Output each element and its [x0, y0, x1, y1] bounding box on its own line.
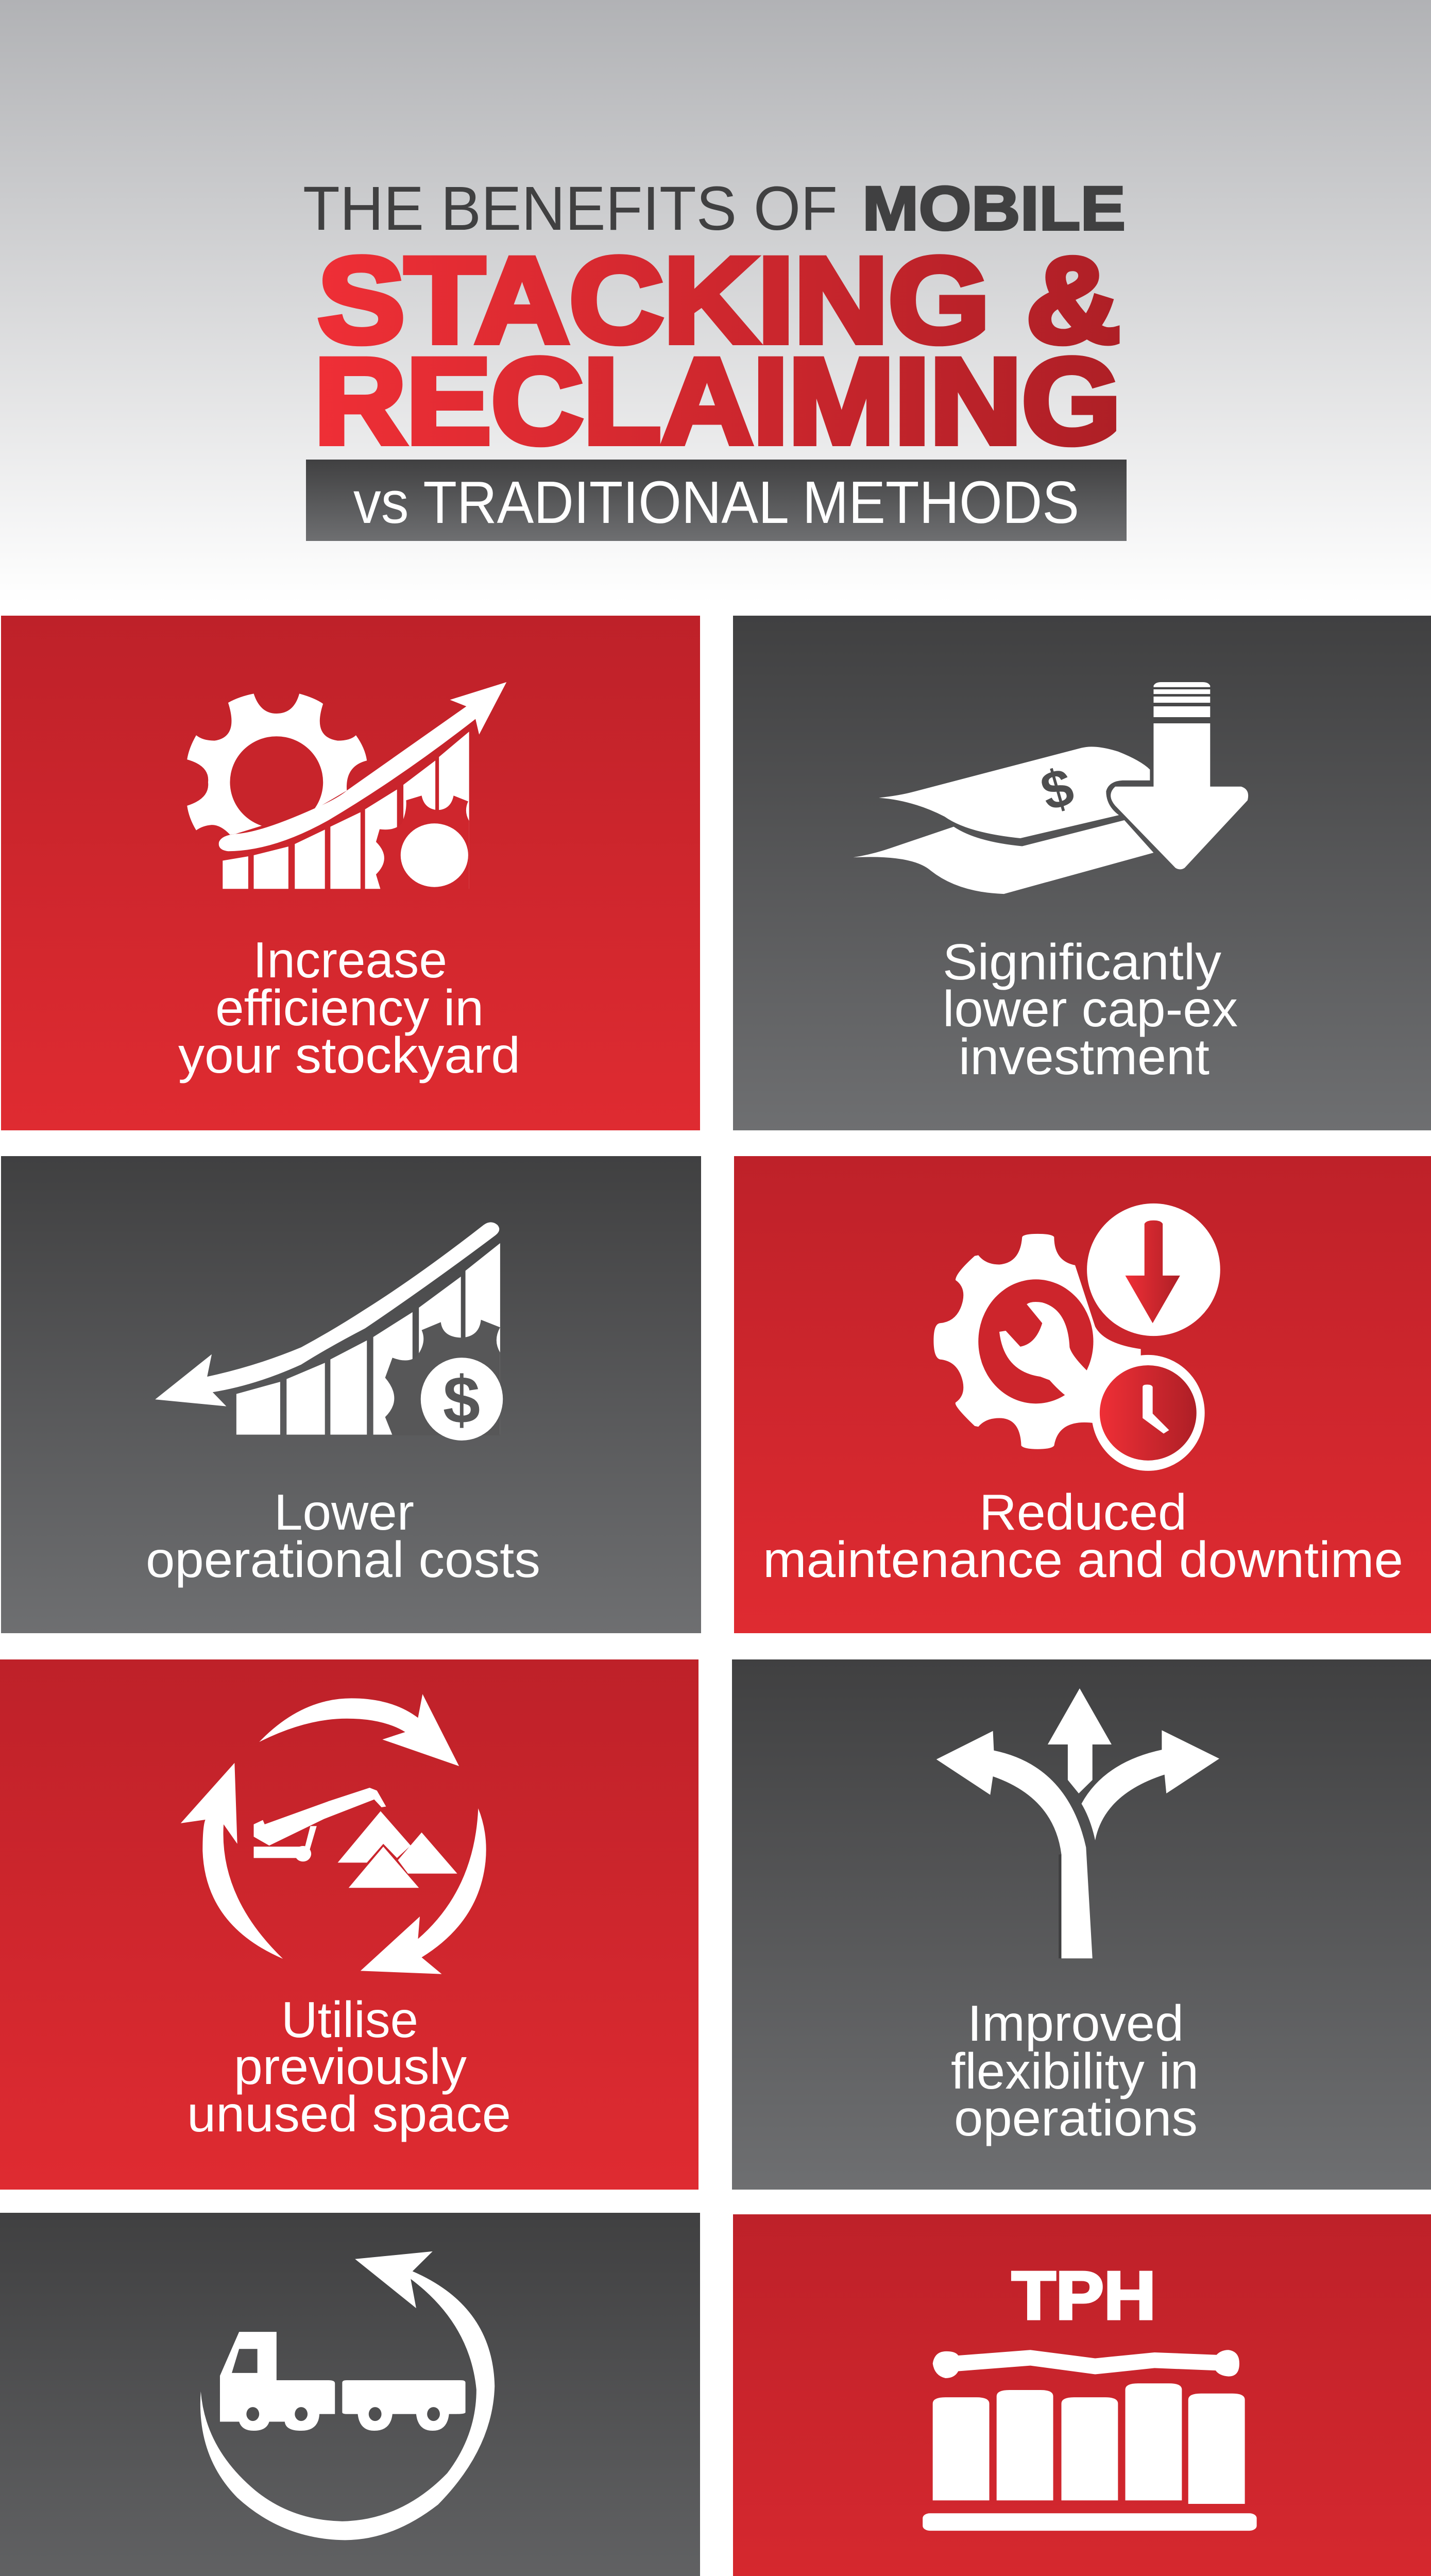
label: lower cap-ex: investment	[959, 1028, 1209, 1085]
label: lower operational costs: Lower	[274, 1484, 414, 1540]
panel: lower operational costs	[1, 1156, 701, 1633]
label: increase efficiency: efficiency in	[215, 979, 484, 1036]
panel: utilise unused space	[0, 1659, 699, 2190]
icon: TPH bars	[923, 2258, 1257, 2531]
icon: descending arrow with bars and dollar gear: $	[443, 1362, 480, 1437]
panel: lower cap-ex	[733, 616, 1431, 1130]
icon: descending arrow with bars and dollar gear	[155, 1222, 503, 1440]
panel: high throughput	[733, 2214, 1431, 2576]
panel: improved flexibility	[732, 1659, 1431, 2190]
title line: the benefits of mobile: THE BENEFITS OF	[303, 173, 838, 243]
label: increase efficiency	[178, 931, 520, 1083]
title line: stacking and: STACKING &	[318, 232, 1120, 368]
label: lower cap-ex: Significantly	[943, 934, 1221, 990]
label: reduced maintenance: Reduced	[979, 1484, 1187, 1540]
icon: banknotes with down arrow: $	[1034, 756, 1080, 823]
label: lower operational costs	[146, 1484, 540, 1588]
label: increase efficiency: Increase	[253, 931, 447, 988]
icon: gear with rising arrow and bars	[187, 682, 506, 890]
label: utilise unused space: unused space	[187, 2086, 511, 2142]
title block	[303, 173, 1127, 541]
panel: easily transported	[0, 2213, 700, 2576]
top background gradient	[0, 0, 1431, 603]
label: reduced maintenance	[763, 1484, 1403, 1588]
panel: reduced maintenance	[734, 1156, 1431, 1633]
icon: gear wrench, down arrow, clock	[933, 1204, 1220, 1471]
label: utilise unused space: previously	[234, 2038, 467, 2095]
subtitle bar: vs TRADITIONAL METHODS	[353, 469, 1079, 536]
label: improved flexibility	[951, 1995, 1199, 2146]
icon: TPH bars: TPH	[1012, 2258, 1156, 2333]
icon: truck in circular arrow	[200, 2251, 495, 2540]
label: improved flexibility: Improved	[967, 1995, 1184, 2052]
panel: increase efficiency	[1, 616, 700, 1130]
title line: the benefits of mobile: MOBILE	[862, 173, 1126, 243]
label: lower operational costs: operational costs	[146, 1531, 540, 1588]
label: utilise unused space: Utilise	[281, 1991, 418, 2048]
label: improved flexibility: operations	[954, 2090, 1198, 2146]
icon: three-way arrow	[936, 1688, 1219, 1958]
icon: stacker and stockpiles in circular arrows	[181, 1694, 486, 1974]
label: reduced maintenance: maintenance and downtime	[763, 1531, 1403, 1588]
title line: the benefits of mobile	[303, 173, 1126, 243]
label: lower cap-ex	[943, 934, 1238, 1085]
title line: reclaiming: RECLAIMING	[314, 333, 1121, 469]
label: improved flexibility: flexibility in	[951, 2043, 1199, 2099]
label: lower cap-ex: lower cap-ex	[943, 980, 1238, 1037]
icon: banknotes with down arrow	[854, 682, 1248, 894]
label: increase efficiency: your stockyard	[178, 1027, 520, 1083]
label: utilise unused space	[187, 1991, 511, 2142]
